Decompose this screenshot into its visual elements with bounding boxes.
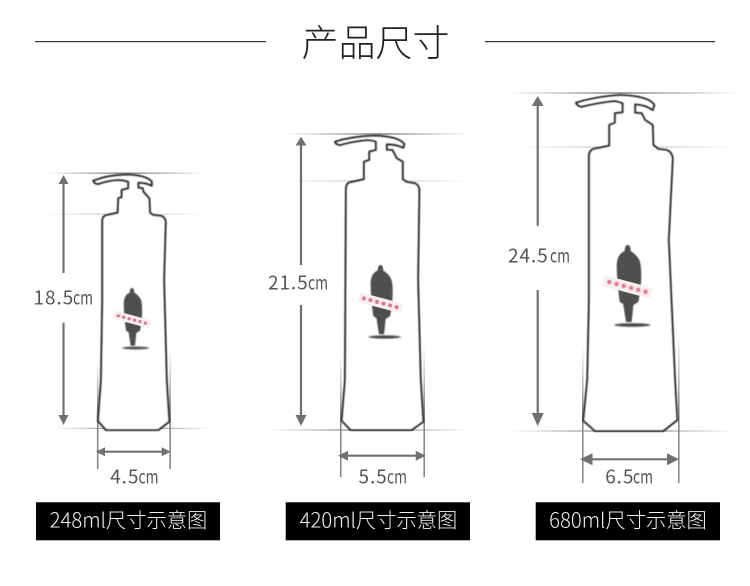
figure logo: 420ml <box>357 265 404 339</box>
height label <box>34 284 93 310</box>
figure logo: 248ml <box>113 288 151 349</box>
caption box: 420ml: 420ml尺寸示意图 <box>300 504 457 534</box>
width label: cm <box>633 462 653 490</box>
height arrow: 21.5cm <box>296 137 306 426</box>
height label: 18.5 <box>34 284 74 310</box>
bottle outline: 680ml <box>576 95 677 431</box>
caption box: 248ml <box>36 502 220 540</box>
height label: cm <box>73 284 93 310</box>
caption box: 420ml <box>286 502 470 540</box>
height label <box>508 242 570 268</box>
caption box: 248ml: 248ml尺寸示意图 <box>50 504 207 534</box>
width label <box>110 462 158 490</box>
panel: 680ml bottle <box>505 92 740 540</box>
caption box: 680ml: 680ml尺寸示意图 <box>549 504 707 534</box>
height arrow: 24.5cm <box>532 96 544 426</box>
width arrow: 4.5cm <box>96 447 171 456</box>
title: 产品尺寸 <box>302 13 450 67</box>
caption box: 680ml <box>536 502 720 540</box>
panel: 248ml bottle <box>34 172 220 540</box>
height label: 24.5 <box>508 242 549 268</box>
width label <box>358 462 407 490</box>
bottle outline: 420ml <box>335 136 423 430</box>
figure logo: 680ml <box>602 245 653 327</box>
height arrow: 18.5cm <box>58 175 68 425</box>
width label: 4.5 <box>110 462 139 490</box>
width label: cm <box>138 462 158 490</box>
width label: 5.5 <box>358 462 388 490</box>
panel: 420ml bottle <box>268 133 470 540</box>
height label: 21.5 <box>268 268 309 296</box>
width label <box>605 462 653 490</box>
bottle outline: 248ml <box>93 175 169 430</box>
width label: 6.5 <box>605 462 634 490</box>
width arrow: 5.5cm <box>338 451 426 461</box>
height label: cm <box>308 268 328 296</box>
width arrow: 6.5cm <box>580 453 679 465</box>
height label <box>268 268 328 296</box>
height label: cm <box>550 242 570 268</box>
width label: cm <box>387 462 407 490</box>
